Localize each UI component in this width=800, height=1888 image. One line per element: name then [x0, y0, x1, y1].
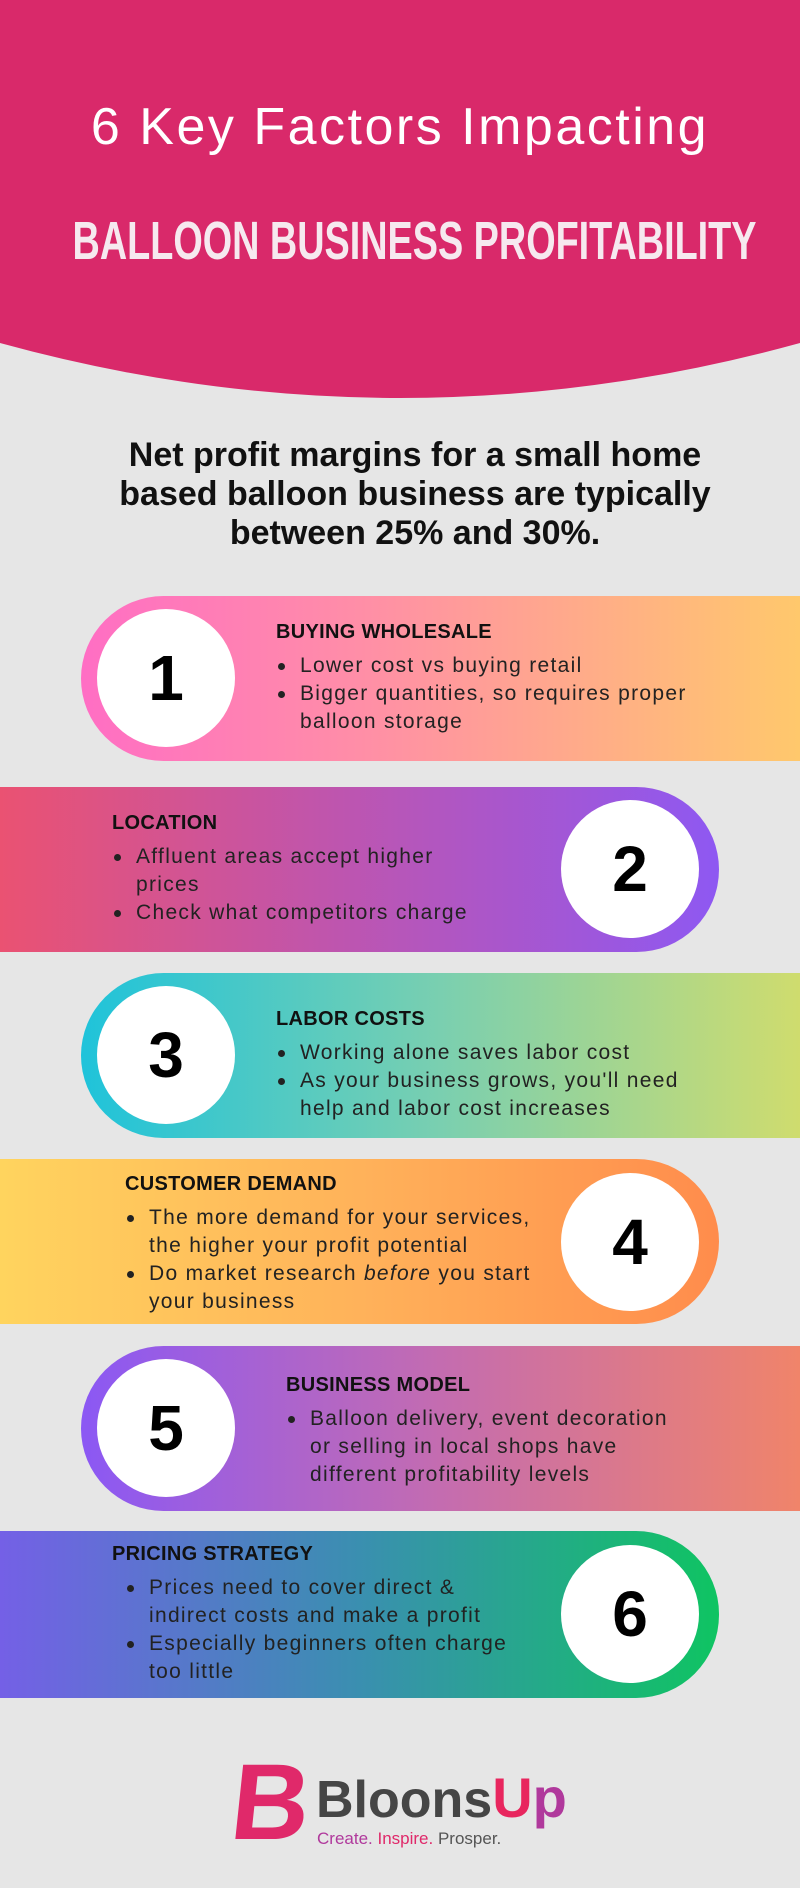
- number circle 2: [561, 800, 699, 938]
- text: customer demand: your business: [149, 1290, 295, 1313]
- number circle 6: 6: [612, 1578, 648, 1650]
- text: pricing strategy: Prices need to cover direct &: [149, 1576, 455, 1599]
- text: buying wholesale: BUYING WHOLESALE: [276, 621, 492, 643]
- number circle 3: 3: [148, 1019, 184, 1091]
- text: labor costs: As your business grows, you'll need: [300, 1069, 679, 1092]
- number circle 5: 5: [148, 1392, 184, 1464]
- text: labor costs: Working alone saves labor cost: [300, 1041, 630, 1064]
- text: labor costs: help and labor cost increases: [300, 1097, 611, 1120]
- text: pricing strategy: Especially beginners often charge: [149, 1632, 507, 1655]
- subtitle: based balloon business are typically: [119, 475, 711, 513]
- text: location: [112, 812, 468, 924]
- text: business model: different profitability levels: [310, 1463, 590, 1486]
- number circle 4: 4: [612, 1206, 648, 1278]
- number circle 1: [97, 609, 235, 747]
- number circle 3: [97, 986, 235, 1124]
- text: pricing strategy: [112, 1543, 507, 1683]
- text: pricing strategy: too little: [149, 1660, 234, 1683]
- text: business model: [286, 1374, 668, 1486]
- text: buying wholesale: Bigger quantities, so requires proper: [300, 682, 687, 705]
- text: labor costs: LABOR COSTS: [276, 1008, 425, 1030]
- text: buying wholesale: Lower cost vs buying retail: [300, 654, 583, 677]
- text: business model: Balloon delivery, event decoration: [310, 1407, 668, 1430]
- text: customer demand: CUSTOMER DEMAND: [125, 1173, 337, 1195]
- text: customer demand: [125, 1173, 531, 1313]
- number circle 6: [561, 1545, 699, 1683]
- text: customer demand: the higher your profit potential: [149, 1234, 468, 1257]
- text: customer demand: Do market research before you start: [149, 1262, 531, 1285]
- text: pricing strategy: PRICING STRATEGY: [112, 1543, 313, 1565]
- text: business model: or selling in local shops have: [310, 1435, 618, 1458]
- subtitle: Net profit margins for a small home: [129, 436, 701, 474]
- card 6: [0, 1531, 719, 1698]
- text: location: Check what competitors charge: [136, 901, 468, 924]
- text: buying wholesale: balloon storage: [300, 710, 463, 733]
- card 3: [81, 973, 800, 1138]
- number circle 5: [97, 1359, 235, 1497]
- card 5: [81, 1346, 800, 1511]
- card 1: [81, 596, 800, 761]
- text: pricing strategy: indirect costs and make a profit: [149, 1604, 481, 1627]
- text: buying wholesale: [276, 621, 687, 733]
- subtitle: [119, 436, 711, 552]
- text: location: Affluent areas accept higher: [136, 845, 434, 868]
- card 4: [0, 1159, 719, 1324]
- subtitle: between 25% and 30%.: [230, 514, 600, 552]
- logo: [226, 1741, 567, 1862]
- title line 2: BALLOON BUSINESS PROFITABILITY: [73, 211, 757, 271]
- number circle 1: 1: [148, 642, 184, 714]
- logo tagline: Create. Inspire. Prosper.: [317, 1829, 501, 1848]
- text: customer demand: The more demand for your services,: [149, 1206, 531, 1229]
- number circle 4: [561, 1173, 699, 1311]
- text: location: prices: [136, 873, 200, 896]
- header banner: [0, 0, 800, 398]
- number circle 2: 2: [612, 833, 648, 905]
- text: labor costs: [276, 1008, 679, 1120]
- text: location: LOCATION: [112, 812, 217, 834]
- logo icon: balloon B: B: [226, 1741, 316, 1862]
- text: business model: BUSINESS MODEL: [286, 1374, 470, 1396]
- card 2: [0, 787, 719, 952]
- logo wordmark: BloonsUp: [316, 1766, 567, 1829]
- title line 1: 6 Key Factors Impacting: [91, 98, 709, 156]
